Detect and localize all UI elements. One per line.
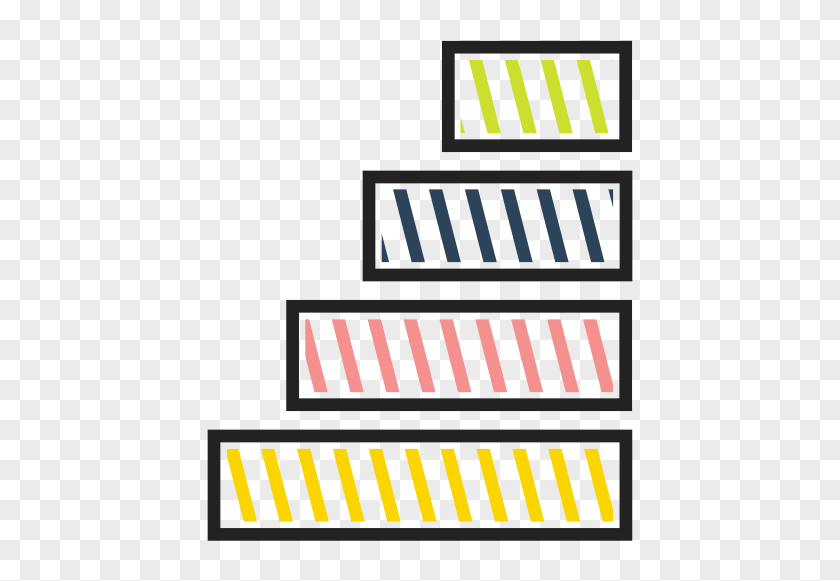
bar 4: yellow striped bar (bottom, longest) [214,436,626,534]
pink bar frame [293,306,626,405]
lime stripes [460,60,614,134]
bar 3: pink striped bar [293,306,626,405]
navy bar frame [369,177,626,275]
yellow bar frame [214,436,626,534]
bar 2: navy striped bar [357,177,640,275]
navy stripes [382,189,614,262]
yellow stripes [225,449,616,522]
pink stripes [296,319,615,392]
lime bar frame [448,47,626,146]
bar 1: lime striped bar (top, shortest) [433,47,644,146]
